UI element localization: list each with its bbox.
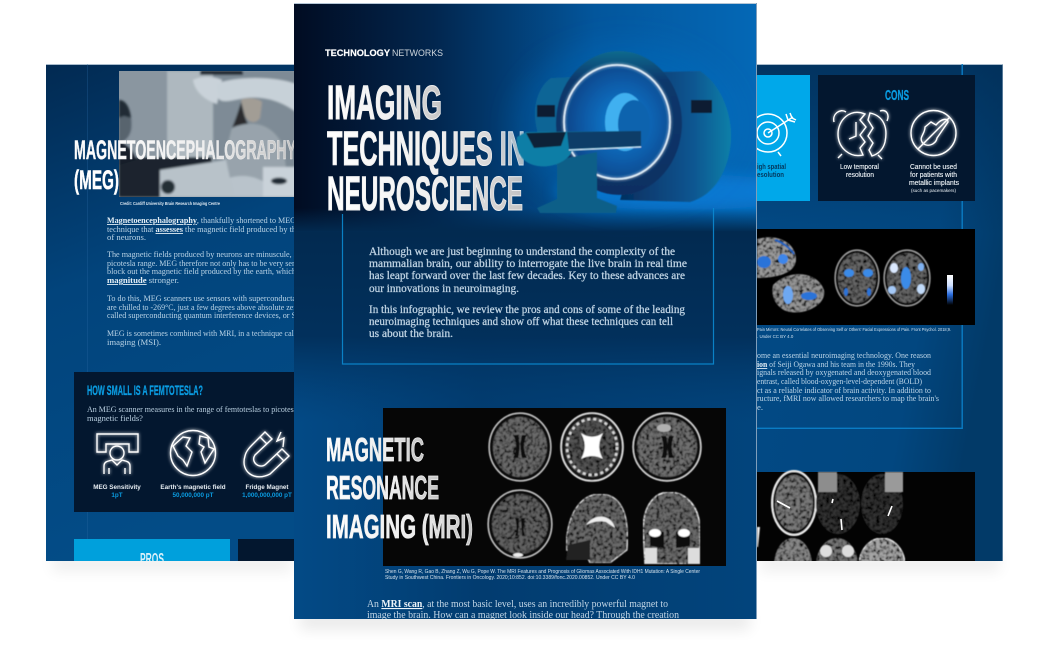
text block: MEG intro: block out the magnetic field produced by the earth, which: [107, 266, 297, 276]
rear wing: [535, 77, 572, 165]
heading: MEG: (MEG): [74, 165, 119, 195]
stat: fridge magnet: 1,000,000,000 pT: [242, 492, 292, 499]
stat: earth's magnetic field: [160, 484, 226, 499]
logo: Technology Networks: NETWORKS: [392, 48, 443, 58]
text block: MRI intro: image the brain. How can a magnet look inside our head? Through the creation: [367, 609, 679, 621]
text block: MEG intro: imaging (MSI).: [107, 337, 161, 347]
brain scan F: [643, 492, 700, 564]
text block: MEG intro: The magnetic fields produced by neurons are minuscule, i: [107, 249, 297, 259]
icon: broken clock: [834, 111, 888, 159]
stat: fridge magnet: [242, 484, 292, 499]
heading: femtotesla: HOW SMALL IS A FEMTOTESLA?: [87, 382, 203, 398]
heading: MRI: [326, 431, 473, 545]
stat: MEG sensitivity: [93, 484, 141, 499]
text: low temporal resolution: Low temporal: [840, 164, 879, 171]
text block: intro: [369, 246, 687, 340]
brain scan B: [561, 413, 623, 481]
image: six MRI brain scans: [383, 408, 726, 566]
text block: MEG intro: [107, 215, 297, 347]
icon: MEG person: [97, 434, 138, 474]
illustration: MRI machine: [510, 40, 740, 213]
text block: intro: neuroimaging techniques and show off what these techniques can tell: [369, 316, 673, 328]
text: high spatial resolution: igh spatial: [757, 164, 786, 171]
image caption: . Under CC BY 4.0: [757, 334, 794, 339]
text block: MEG intro: of neurons.: [107, 232, 146, 242]
text: cannot be used: Cannot be used: [910, 164, 957, 171]
text block: fMRI: e.: [757, 402, 763, 412]
text: cannot be used: metallic implants: [909, 180, 959, 187]
text block: intro: Although we are just beginning to understand the complexity of the: [369, 246, 675, 258]
photo: MEG scanner and patient: [119, 71, 296, 197]
panel: pros: PROS: [140, 551, 164, 568]
scanner ring body: [556, 51, 682, 195]
text block: MEG intro: To do this, MEG scanners use sensors with superconducta: [107, 293, 296, 303]
text block: MEG intro: Magnetoencephalography, thankfully shortened to MEG: [107, 215, 296, 225]
text block: MEG intro: MEG is sometimes combined with MRI, in a technique call: [107, 328, 297, 338]
text: low temporal resolution: [840, 164, 879, 177]
image caption: [757, 328, 951, 338]
stat: earth's magnetic field: Earth's magnetic field: [160, 484, 226, 491]
brain scan C: [633, 413, 701, 481]
image caption: Study in Southwest China. Frontiers in Oncology. 2020;10:852. doi:10.3389/fonc.2020.00852. Under CC BY 4.0: [385, 575, 635, 581]
text block: intro: mammalian brain, our ability to interrogate the live brain in real time: [369, 258, 687, 270]
text block: fMRI: ructure, fMRI now allowed researchers to map the brain's: [757, 393, 940, 403]
text block: MEG intro: called superconducting quantum interference devices, or S: [107, 310, 296, 320]
stat: MEG sensitivity: 1pT: [111, 492, 123, 499]
text block: fMRI: [757, 350, 940, 412]
text block: MEG intro: picotesla range. MEG therefore not only has to be very sen: [107, 258, 297, 268]
photo credit: Credit: Cardiff University Brain Research Imaging Centre: [120, 201, 220, 206]
text block: MEG intro: are chilled to -269°C, just a few degrees above absolute zer: [107, 302, 296, 312]
icon: magnet: [244, 432, 289, 477]
equipment: [119, 157, 212, 197]
text: femtotesla intro: [87, 406, 294, 423]
panel: centre page: [294, 3, 805, 621]
side housing: [620, 71, 731, 202]
image: fMRI brain activation: [757, 229, 975, 325]
logo: Technology Networks: TECHNOLOGY: [325, 48, 390, 58]
outlined intro frame: [342, 208, 714, 364]
text: cannot be used: [909, 164, 959, 193]
logo: Technology Networks: [325, 49, 443, 56]
text: femtotesla intro: magnetic fields?: [87, 413, 143, 423]
title: TECHNIQUES IN: [327, 123, 525, 176]
text: high spatial resolution: esolution: [757, 172, 784, 179]
text block: MRI intro: An MRI scan, at the most basic level, uses an incredibly powerful magnet to: [367, 598, 668, 610]
table: [517, 131, 641, 166]
panel: left page MEG: [46, 64, 297, 568]
page shadows: [52, 552, 1000, 630]
title: [327, 85, 524, 211]
icon: earth: [170, 430, 216, 476]
scanner arm and dome: [193, 77, 222, 104]
text block: fMRI: ignals released by oxygenated and deoxygenated blood: [757, 367, 932, 377]
image caption: Shen G, Wang R, Gao B, Zhang Z, Wu G, Pope W. The MRI Features and Prognosis of Gliomas Associated With IDH1 Mutation: A Single Center: [385, 569, 700, 575]
text: high spatial resolution: [757, 164, 786, 177]
foreground man: [119, 116, 132, 140]
colour scale: [947, 275, 953, 305]
brain scan D: [488, 490, 552, 558]
text block: fMRI: ct as a reliable indicator of brain activity. In addition to: [757, 385, 932, 395]
text block: MEG intro: technique that assesses the magnetic field produced by th: [107, 224, 297, 234]
panel: how small is a femtotesla: [74, 372, 297, 512]
image caption: Pain Mirrors: Neural Correlates of Observing Self or Others' Facial Expressions of Pain. Front Psychol. 2018;9.: [757, 327, 951, 332]
bore: [605, 93, 645, 151]
text block: fMRI: entrast, called blood-oxygen-level-dependent (BOLD): [757, 376, 922, 386]
patient: [241, 98, 262, 122]
floor glow: [555, 174, 805, 210]
stat: earth's magnetic field: 50,000,000 pT: [173, 492, 214, 499]
text block: fMRI: ion of Seiji Ogawa and his team in the 1990s. They: [757, 359, 916, 369]
text block: MEG intro: magnitude stronger.: [107, 275, 179, 285]
text block: fMRI: ome an essential neuroimaging technology. One reason: [757, 350, 932, 360]
text block: intro: our innovations in neuroimaging.: [369, 283, 519, 295]
text block: intro: In this infographic, we review the pros and cons of some of the leading: [369, 304, 685, 316]
text block: intro: has leapt forward over the last few decades. Key to these advances are: [369, 270, 685, 282]
panel: right page fMRI: [749, 64, 1003, 592]
image: CT and MRI scans: [757, 469, 975, 561]
panel: cons: [238, 539, 296, 561]
text block: MRI intro: [367, 598, 679, 621]
text: low temporal resolution: resolution: [846, 172, 874, 179]
image caption: [385, 569, 700, 581]
heading: MRI: IMAGING (MRI): [326, 508, 473, 545]
icon: target: [757, 112, 796, 156]
text: cannot be used: (such as pacemakers): [911, 188, 957, 193]
heading: MEG: [74, 135, 296, 195]
brain scan E: [566, 494, 628, 563]
brain scan A: [489, 413, 551, 481]
heading: MRI: RESONANCE: [326, 469, 439, 506]
text: cannot be used: for patients with: [910, 172, 957, 179]
light ring: [564, 65, 670, 179]
heading: cons: CONS: [885, 87, 909, 104]
table stand: [537, 152, 617, 213]
text block: intro: us about the brain.: [369, 328, 453, 340]
panel: cons: [818, 75, 975, 201]
title: NEUROSCIENCE: [327, 168, 523, 221]
icon: no implants: [911, 110, 956, 156]
panel: pros continued: [757, 75, 810, 201]
heading: MEG: MAGNETOENCEPHALOGRAPHY: [74, 135, 296, 165]
text: femtotesla intro: An MEG scanner measures in the range of femtoteslas to picotesl: [87, 404, 297, 414]
title: IMAGING: [327, 77, 442, 130]
stat: MEG sensitivity: MEG Sensitivity: [93, 484, 141, 491]
heading: MRI: MAGNETIC: [326, 431, 424, 468]
stat: fridge magnet: Fridge Magnet: [245, 484, 289, 491]
panel: pros: [74, 539, 230, 561]
